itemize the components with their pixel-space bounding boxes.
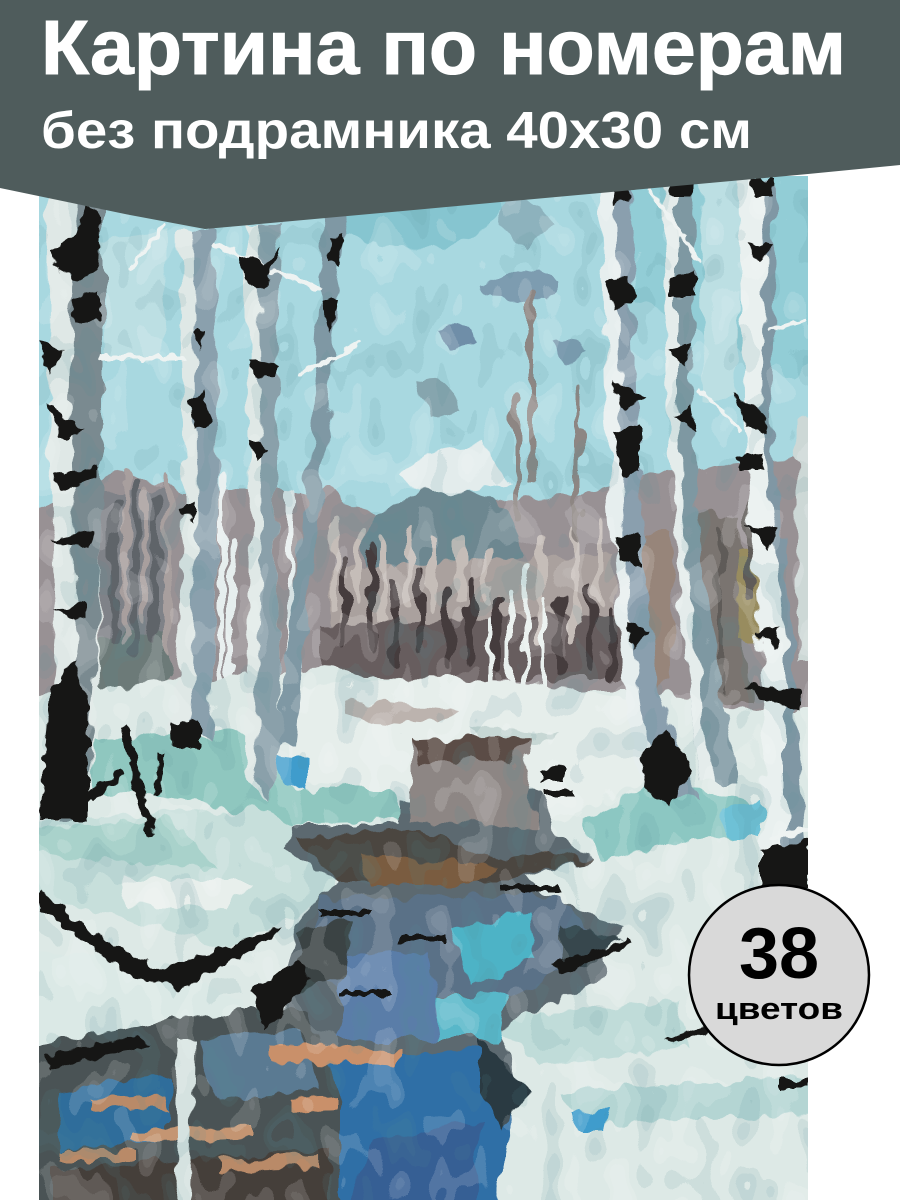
subtitle: без подрамника 40х30 см: [41, 102, 752, 160]
bark marks, branches and dark twigs: [39, 178, 808, 1088]
birch trunks: [39, 178, 820, 885]
badge: 38 colours: [689, 885, 869, 1065]
snow ground: [39, 665, 808, 1128]
forest vertical brush strokes: [115, 290, 750, 720]
title: Картина по номерам: [41, 5, 846, 91]
dark reflections bottom left: [0, 1010, 400, 1200]
distant forest band: [39, 440, 808, 713]
sky: [98, 176, 808, 418]
branches: [100, 190, 808, 840]
badge: 38 colours: цветов: [715, 991, 843, 1026]
header banner: [0, 0, 900, 229]
stream with reflections: [280, 735, 620, 1200]
black birch bark marks: [39, 178, 808, 1088]
panel: painting of a birch forest in winter: [39, 176, 808, 1200]
badge: 38 colours: 38: [739, 914, 819, 994]
